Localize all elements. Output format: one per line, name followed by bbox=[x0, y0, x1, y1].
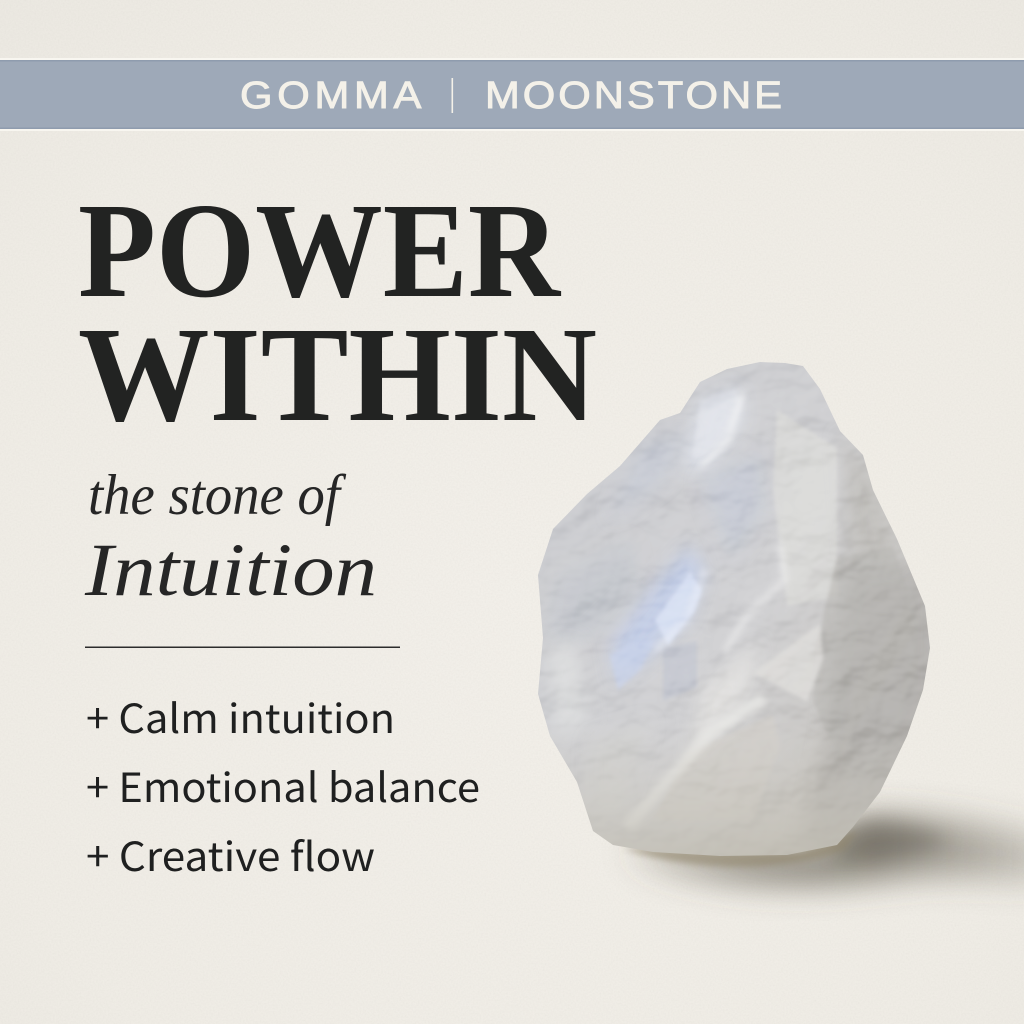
crystalline relief texture bbox=[540, 375, 926, 789]
benefits list: + Creative flow bbox=[86, 825, 375, 883]
base shading bbox=[580, 758, 890, 856]
crisp facets bbox=[612, 390, 894, 721]
divider line bbox=[85, 646, 400, 648]
title: POWER bbox=[78, 176, 562, 326]
subtitle: the stone of bbox=[88, 464, 347, 527]
header text: Moonstone: MOONSTONE bbox=[485, 75, 785, 117]
title: WITHIN bbox=[78, 300, 597, 450]
header band bbox=[0, 58, 1024, 131]
soft tonal regions bbox=[816, 562, 930, 809]
benefits list: + Calm intuition bbox=[86, 687, 395, 745]
moonstone rock bbox=[530, 355, 940, 865]
subtitle: Intuition bbox=[84, 529, 377, 612]
benefits list: + Emotional balance bbox=[86, 756, 480, 814]
facet edges bbox=[630, 395, 785, 824]
stone shadow bbox=[622, 815, 1024, 885]
title bbox=[78, 176, 597, 450]
benefits list bbox=[86, 687, 480, 883]
subtitle bbox=[84, 464, 377, 612]
header divider bbox=[452, 78, 453, 113]
header text: Gomma: GOMMA bbox=[240, 75, 426, 117]
